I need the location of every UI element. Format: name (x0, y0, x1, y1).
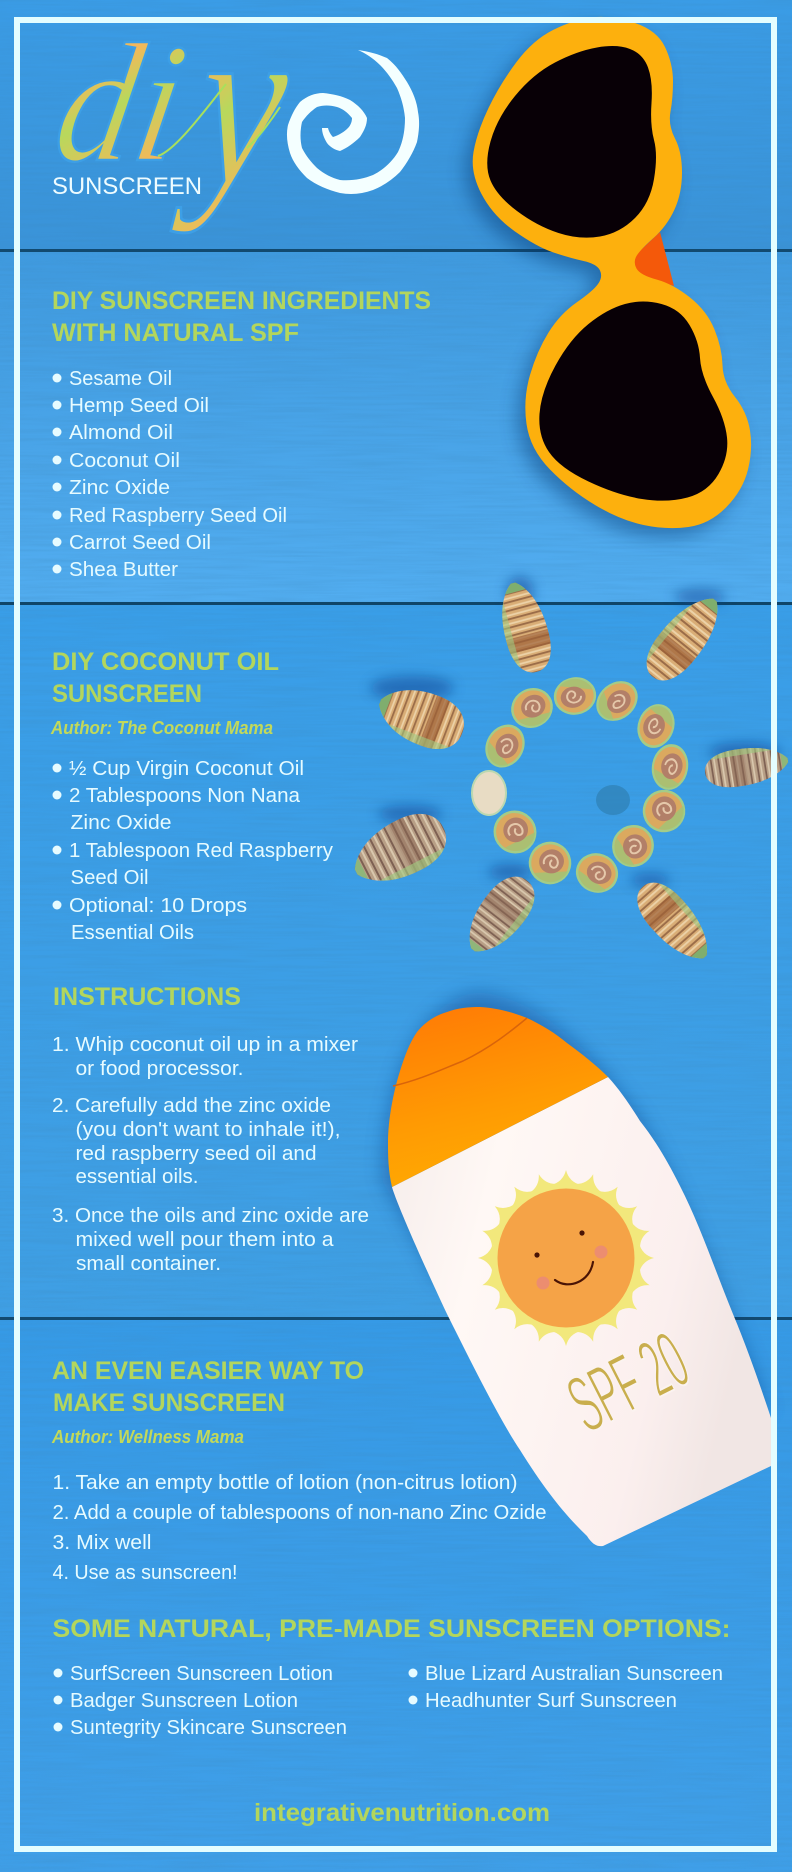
recipe list: 1 Tablespoon Red Raspberry (69, 840, 333, 862)
left product list: SurfScreen Sunscreen Lotion (70, 1663, 333, 1685)
numbered steps (52, 1472, 546, 1584)
recipe list: 2 Tablespoons Non Nana (69, 785, 301, 807)
left product list: Suntegrity Skincare Sunscreen (70, 1717, 347, 1739)
panel: pre-made options (52, 1615, 730, 1739)
heading: MAKE SUNSCREEN (53, 1389, 285, 1417)
panel: easier way (51, 1357, 547, 1584)
numbered steps: mixed well pour them into a (76, 1229, 334, 1251)
ingredients list: Hemp Seed Oil (69, 395, 209, 417)
bottle body (392, 1077, 771, 1546)
sun face (534, 1230, 608, 1290)
heading: SOME NATURAL, PRE-MADE SUNSCREEN OPTIONS: (52, 1615, 730, 1643)
recipe list: ½ Cup Virgin Coconut Oil (69, 758, 304, 780)
left product list: Badger Sunscreen Lotion (70, 1690, 298, 1712)
title: diy script (43, 0, 301, 234)
heading: SUNSCREEN (52, 680, 202, 708)
recipe list: Zinc Oxide (70, 812, 172, 834)
bottle shadow (382, 992, 770, 1412)
numbered steps: essential oils. (76, 1166, 198, 1188)
icon: orange heart sunglasses (465, 17, 751, 537)
right product list: Blue Lizard Australian Sunscreen (425, 1663, 723, 1685)
right product list: Headhunter Surf Sunscreen (425, 1690, 677, 1712)
heading: DIY COCONUT OIL (52, 648, 279, 676)
ingredients list: Shea Butter (69, 559, 178, 581)
shell shadows (370, 576, 781, 887)
footer url: integrativenutrition.com (254, 1799, 550, 1827)
recipe list: Optional: 10 Drops (69, 895, 247, 917)
panel: coconut oil recipe (50, 648, 333, 944)
heading (52, 1357, 364, 1417)
right product list (408, 1663, 723, 1712)
ingredients list: Zinc Oxide (69, 477, 170, 499)
heading (52, 648, 279, 708)
glasses arm (628, 232, 674, 286)
panel: ingredients (52, 287, 431, 581)
ingredients list: Carrot Seed Oil (69, 532, 211, 554)
numbered steps: (you don't want to inhale it!), (76, 1119, 340, 1141)
numbered steps: 2. Carefully add the zinc oxide (52, 1095, 331, 1117)
glasses shadow (465, 26, 743, 537)
numbered steps: 4. Use as sunscreen! (52, 1562, 238, 1584)
ingredients list: Sesame Oil (69, 368, 172, 390)
recipe list (52, 758, 333, 944)
icon: white swirl (287, 50, 419, 194)
lens: upper (487, 46, 656, 238)
numbered steps: 3. Mix well (52, 1532, 152, 1554)
heading (52, 287, 431, 347)
recipe list: Seed Oil (70, 867, 148, 889)
panel: instructions (52, 983, 369, 1275)
ingredients list (52, 368, 287, 581)
bottle cap (388, 1007, 608, 1187)
title: diy script: di (43, 9, 199, 198)
shell rays (343, 577, 791, 972)
author credit: Author: Wellness Mama (51, 1426, 244, 1447)
heading: AN EVEN EASIER WAY TO (52, 1357, 364, 1385)
numbered steps: 2. Add a couple of tablespoons of non-nano Zinc Ozide (52, 1502, 546, 1524)
numbered steps: or food processor. (76, 1058, 243, 1080)
ingredients list: Red Raspberry Seed Oil (69, 505, 287, 527)
numbered steps: 3. Once the oils and zinc oxide are (52, 1205, 369, 1227)
numbered steps: 1. Take an empty bottle of lotion (non-citrus lotion) (52, 1472, 518, 1494)
icon: sun made of seashells (343, 576, 791, 972)
ingredients list: Coconut Oil (69, 450, 180, 472)
numbered steps: 1. Whip coconut oil up in a mixer (52, 1034, 358, 1056)
cap seam (393, 1018, 527, 1086)
heading: INSTRUCTIONS (53, 983, 241, 1011)
printed sun (478, 1170, 654, 1346)
title block (43, 0, 419, 234)
heading: WITH NATURAL SPF (52, 319, 299, 347)
knot in the wood (596, 785, 630, 815)
numbered steps (52, 1034, 369, 1275)
lens: lower (539, 302, 727, 501)
ingredients list: Almond Oil (69, 422, 173, 444)
shell ring (472, 674, 691, 897)
recipe list: Essential Oils (71, 922, 194, 944)
subtitle: SUNSCREEN (52, 173, 202, 200)
icon: sunscreen bottle (382, 992, 771, 1546)
numbered steps: small container. (76, 1253, 221, 1275)
numbered steps: red raspberry seed oil and (76, 1143, 316, 1165)
glasses frame (473, 17, 751, 528)
heading: DIY SUNSCREEN INGREDIENTS (52, 287, 431, 315)
author credit: Author: The Coconut Mama (50, 717, 273, 738)
left product list (54, 1663, 347, 1739)
